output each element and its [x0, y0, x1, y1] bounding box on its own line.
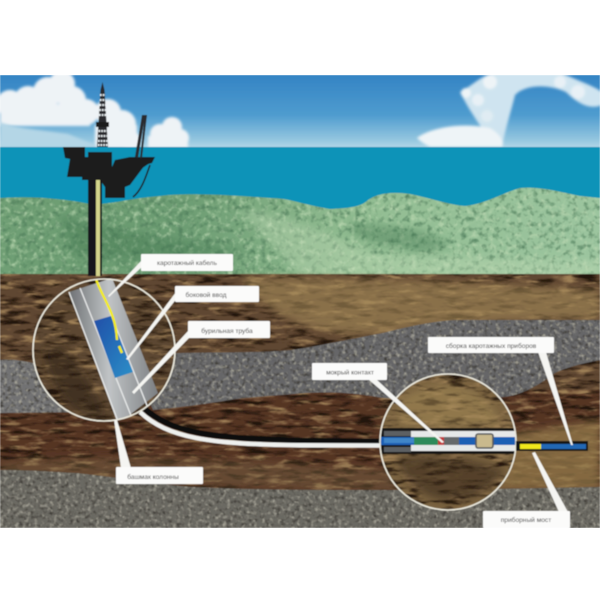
magnified soil shadow	[45, 345, 105, 418]
outer casing	[380, 428, 516, 454]
ring	[33, 279, 175, 421]
callout: lateral entry: боковой ввод	[186, 291, 227, 299]
callout: instrument bridge: приборный мост	[501, 516, 551, 524]
clouds: left	[0, 71, 189, 150]
callout: instrument bridge	[483, 452, 570, 528]
ring	[380, 374, 516, 510]
stratum: middle dark soil	[0, 390, 600, 495]
hills: lighter slopes	[240, 210, 600, 278]
callout: logging tool assembly	[428, 337, 573, 445]
stratum: bottom gravel	[0, 470, 600, 528]
clouds: right	[417, 72, 600, 147]
rig: platform	[63, 147, 155, 198]
wireline cable	[96, 279, 117, 340]
tool string	[380, 437, 516, 445]
wellbore: curved horizontal pipe	[140, 407, 384, 446]
connector	[476, 434, 493, 448]
magnifier: lateral entry	[33, 278, 175, 424]
callout: wet connect: мокрый контакт	[326, 368, 374, 376]
callout: logging cable: каротажный кабель	[157, 259, 218, 267]
callout: casing shoe	[114, 420, 203, 484]
instrument bridge	[520, 444, 541, 449]
callout: casing shoe: башмак колонны	[127, 473, 179, 481]
tool blue section	[94, 316, 133, 378]
rig: flare booms	[135, 115, 147, 158]
logging tool string outside	[516, 441, 588, 451]
callout: wet connect	[312, 363, 444, 443]
sky	[0, 75, 600, 148]
callout: drill pipe	[132, 321, 270, 394]
hills: darker slopes	[60, 215, 450, 260]
callout: logging tool assembly: сборка каротажных приборов	[446, 342, 537, 350]
casing stripes	[69, 282, 148, 424]
stratum: gravel left	[0, 359, 68, 414]
rig: derrick	[96, 82, 109, 147]
stratum: middle gravel right	[130, 320, 600, 410]
callout: logging cable	[108, 254, 233, 297]
scene: sky, sea, hills and rock strata	[0, 71, 600, 528]
sea	[0, 146, 600, 210]
stratum: upper brown soil	[0, 274, 600, 404]
hills	[0, 188, 600, 278]
wellbore: vertical pipe	[88, 180, 102, 276]
logging assembly	[541, 444, 586, 449]
callout: lateral entry	[126, 286, 259, 360]
magnifier: wet connect	[380, 374, 516, 510]
casing	[69, 278, 158, 424]
rig: risers	[130, 162, 150, 197]
callout: drill pipe: бурильная труба	[201, 327, 253, 335]
